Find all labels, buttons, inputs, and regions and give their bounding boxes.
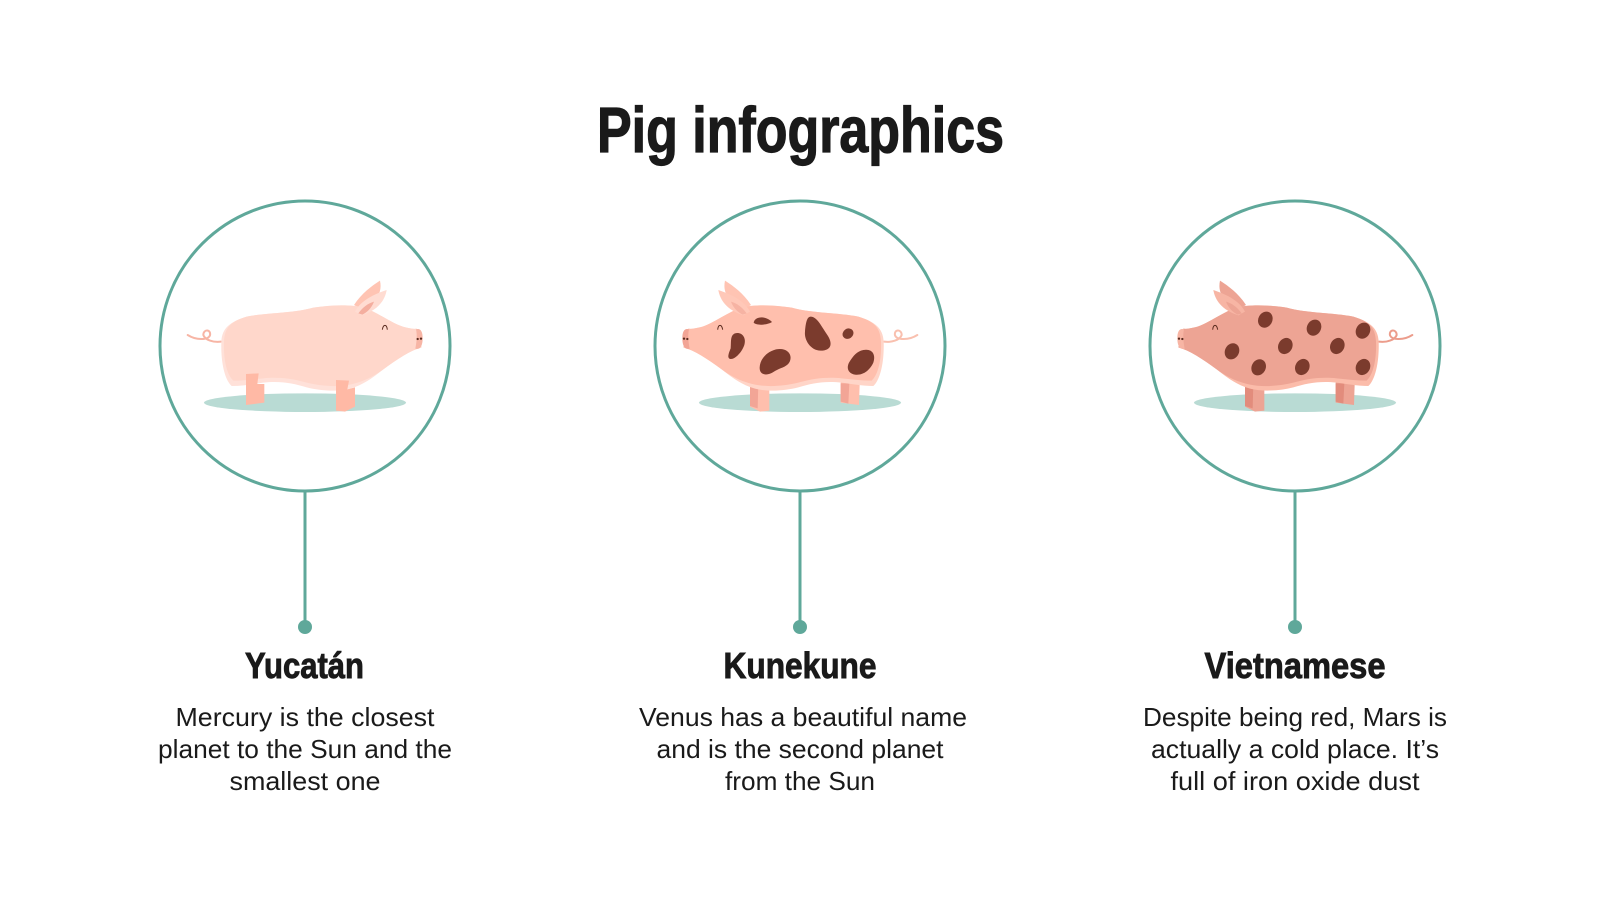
- icon: spotted pig: [682, 281, 917, 412]
- heading: Vietnamese: [1204, 645, 1386, 686]
- title: Pig infographics: [597, 94, 1004, 166]
- description: and is the second planet: [656, 734, 944, 764]
- description: Mercury is the closest: [176, 702, 435, 732]
- panel: Kunekune: [639, 201, 967, 796]
- description: Despite being red, Mars is: [1143, 702, 1447, 732]
- description: planet to the Sun and the: [158, 734, 452, 764]
- circle frame: [655, 201, 945, 491]
- panel: Vietnamese: [1143, 201, 1447, 796]
- connector line with dot: [793, 490, 807, 634]
- description: smallest one: [230, 766, 380, 796]
- icon: dotted pig: [1177, 281, 1412, 412]
- description: from the Sun: [725, 766, 875, 796]
- connector line with dot: [298, 490, 312, 634]
- connector line with dot: [1288, 490, 1302, 634]
- circle frame: [160, 201, 450, 491]
- circle frame: [1150, 201, 1440, 491]
- heading: Yucatán: [245, 645, 364, 686]
- icon: pale pig: [188, 281, 423, 412]
- description: full of iron oxide dust: [1170, 766, 1420, 796]
- heading: Kunekune: [724, 645, 876, 686]
- panel: Yucatán: [158, 201, 452, 796]
- description: actually a cold place. It’s: [1151, 734, 1439, 764]
- description: Venus has a beautiful name: [639, 702, 967, 732]
